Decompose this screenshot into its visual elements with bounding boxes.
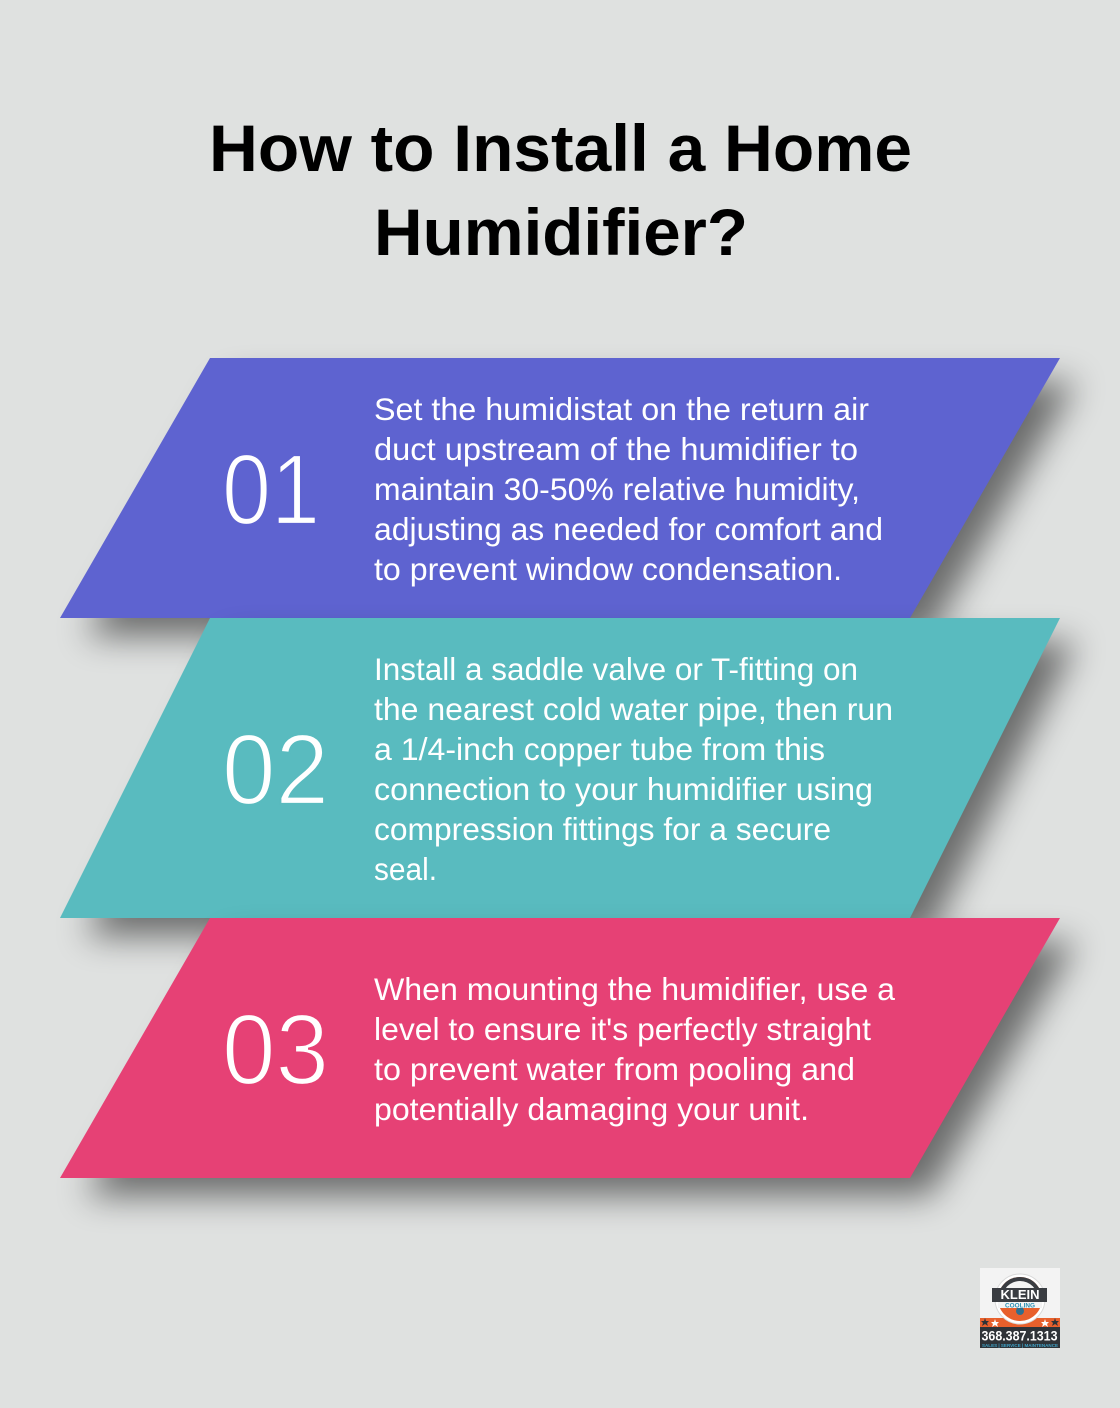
step 2 text: the nearest cold water pipe, then run	[374, 691, 893, 727]
logo: Klein Cooling	[980, 1268, 1060, 1348]
step 2 shape	[60, 618, 1060, 918]
step 2 text: seal.	[374, 851, 437, 887]
step 2 text: Install a saddle valve or T-fitting on	[374, 651, 858, 687]
step 1 text: duct upstream of the humidifier to	[374, 431, 858, 467]
logo: Klein Cooling: 368.387.1313	[982, 1328, 1058, 1344]
title: Humidifier?	[374, 195, 748, 269]
step 2 text: connection to your humidifier using	[374, 771, 873, 807]
step 1 text: adjusting as needed for comfort and	[374, 511, 883, 547]
step 3 text	[374, 971, 895, 1127]
step 3 text: to prevent water from pooling and	[374, 1051, 855, 1087]
step 3 text: When mounting the humidifier, use a	[374, 971, 895, 1007]
step 1 number: 01	[222, 434, 320, 546]
logo: Klein Cooling: KLEIN	[1000, 1287, 1040, 1302]
step 1 shape	[60, 358, 1060, 618]
panel: step 1	[60, 358, 1076, 636]
step 2 number: 02	[222, 714, 329, 826]
step 1 text: maintain 30-50% relative humidity,	[374, 471, 860, 507]
logo: Klein Cooling: SALES | SERVICE | MAINTENANCE	[982, 1343, 1058, 1348]
step 1 text: to prevent window condensation.	[374, 551, 842, 587]
step 3 text: potentially damaging your unit.	[374, 1091, 809, 1127]
panel: step 2	[60, 618, 1076, 936]
step 2 text: compression fittings for a secure	[374, 811, 831, 847]
panel: step 3	[60, 918, 1076, 1196]
step 2 text: a 1/4-inch copper tube from this	[374, 731, 825, 767]
step 1 text: Set the humidistat on the return air	[374, 391, 869, 427]
title	[209, 111, 912, 269]
step 3 shape	[60, 918, 1060, 1178]
step 1 text	[374, 391, 883, 587]
title: How to Install a Home	[209, 111, 912, 185]
logo: Klein Cooling: COOLING	[1005, 1302, 1035, 1310]
step 3 number: 03	[222, 994, 329, 1106]
step 2 text	[374, 651, 893, 887]
step 3 text: level to ensure it's perfectly straight	[374, 1011, 871, 1047]
